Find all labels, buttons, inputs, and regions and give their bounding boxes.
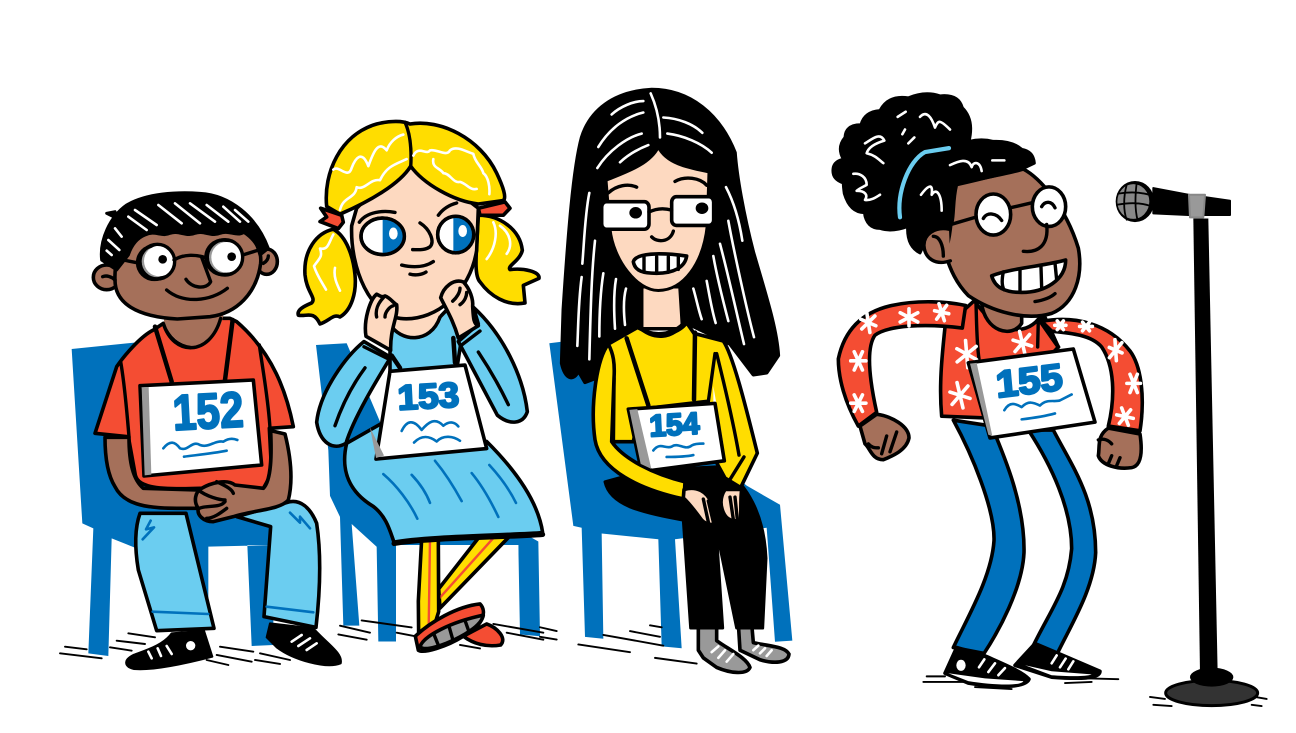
chair 153 (316, 343, 540, 641)
long hair 154 (562, 90, 778, 382)
badge 155 (968, 349, 1095, 438)
yellow sweater 154 (593, 320, 757, 499)
floor shadow lines 155 (923, 676, 1118, 689)
neck 153 (391, 306, 441, 337)
head 152 (93, 193, 277, 319)
badge 153 (370, 365, 487, 459)
sleeves 153 (317, 307, 527, 446)
lanyard 154 (627, 333, 695, 405)
badge 152 (140, 380, 262, 476)
badge 154: 154 (649, 407, 700, 444)
dress bodice 153 (390, 308, 462, 380)
character: contestant 152 seated boy (60, 193, 341, 669)
glasses and face features 155 (951, 187, 1066, 302)
hair 153 (326, 121, 505, 214)
blue trousers 155 (953, 420, 1096, 653)
badge 155: 155 (994, 357, 1064, 406)
character: contestant 153 seated blonde girl (298, 121, 543, 651)
badge 152: 152 (171, 381, 245, 441)
neck 152 (164, 315, 223, 346)
patterned shirt 155 (838, 302, 1142, 431)
neck 154 (642, 287, 683, 329)
far foot red shoe 153 (463, 624, 503, 646)
microphone stand (1150, 219, 1267, 706)
face 154 (606, 147, 709, 290)
floor shadow lines 152 (60, 633, 290, 665)
socks and shoes 154 (698, 623, 789, 672)
striped stockings 153 (418, 535, 511, 636)
right hand 155 (1098, 428, 1141, 468)
face features 153 (359, 203, 474, 275)
badge 154 (628, 403, 724, 470)
hands 154 (683, 488, 742, 524)
badge 153: 153 (397, 376, 460, 418)
microphone (1116, 181, 1230, 222)
face 153 (352, 156, 478, 319)
jeans 152 (136, 501, 320, 631)
character: contestant 154 seated girl with long black hair (540, 90, 792, 672)
face 155 (945, 169, 1080, 316)
hair highlights 154 (577, 93, 754, 359)
crossed shoe and sole 153 (415, 604, 483, 651)
arms and clasped hands 152 (105, 431, 291, 522)
pigtails 153 (298, 215, 539, 324)
sneakers 155 (945, 644, 1100, 686)
chair 154 (549, 340, 792, 648)
shirt 152 (95, 318, 293, 489)
lanyard 153 (392, 338, 455, 368)
chair 152 (72, 342, 273, 656)
character: contestant 155 standing at the microphone (833, 94, 1267, 706)
floor shadow lines 153 (338, 620, 543, 648)
floor shadow lines 154 (540, 625, 697, 664)
dress skirt 153 (345, 419, 543, 544)
lanyard 152 (155, 320, 233, 382)
neck 155 (982, 304, 1022, 331)
left hand 155 (860, 414, 909, 460)
hands 153 (365, 281, 478, 350)
black trousers 154 (605, 467, 766, 628)
hair ties 153 (320, 202, 510, 229)
shoes 152 (126, 623, 341, 669)
face features 154 (602, 178, 714, 273)
curly hair bun 155 (833, 94, 1034, 253)
ear 155 (924, 229, 950, 262)
